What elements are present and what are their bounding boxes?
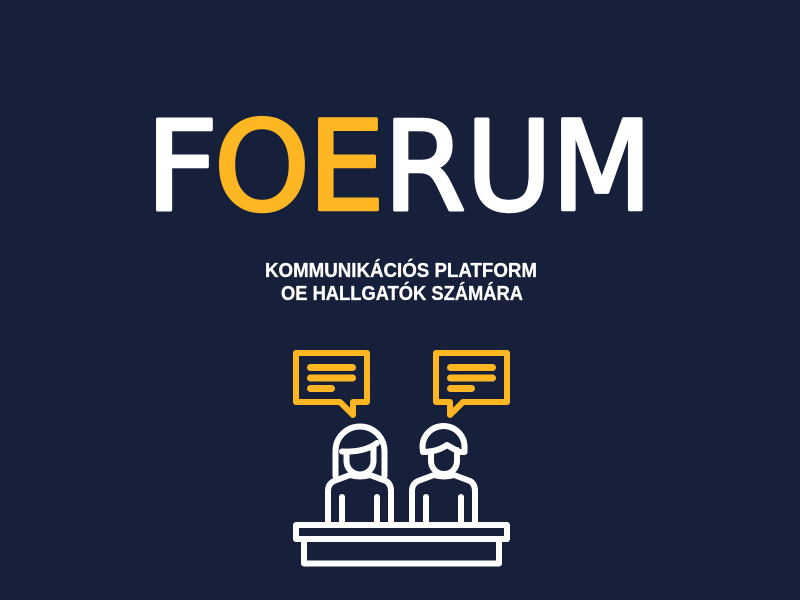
subtitle <box>265 258 537 305</box>
icon: left speech bubble <box>296 353 367 415</box>
icon: woman <box>328 426 391 522</box>
title: FOERUM: E <box>308 95 385 239</box>
title: FOERUM: M <box>551 95 652 239</box>
subtitle: OE HALLGATÓK SZÁMÁRA <box>281 281 523 305</box>
title: FOERUM: U <box>466 95 552 239</box>
icon: right speech bubble <box>436 353 507 415</box>
title: FOERUM <box>145 95 652 239</box>
title: FOERUM: F <box>145 95 218 239</box>
icon: man <box>412 426 475 522</box>
subtitle: KOMMUNIKÁCIÓS PLATFORM <box>265 258 537 282</box>
title: FOERUM: R <box>383 95 466 239</box>
title: FOERUM: O <box>214 95 310 239</box>
icon: desk <box>296 525 507 564</box>
